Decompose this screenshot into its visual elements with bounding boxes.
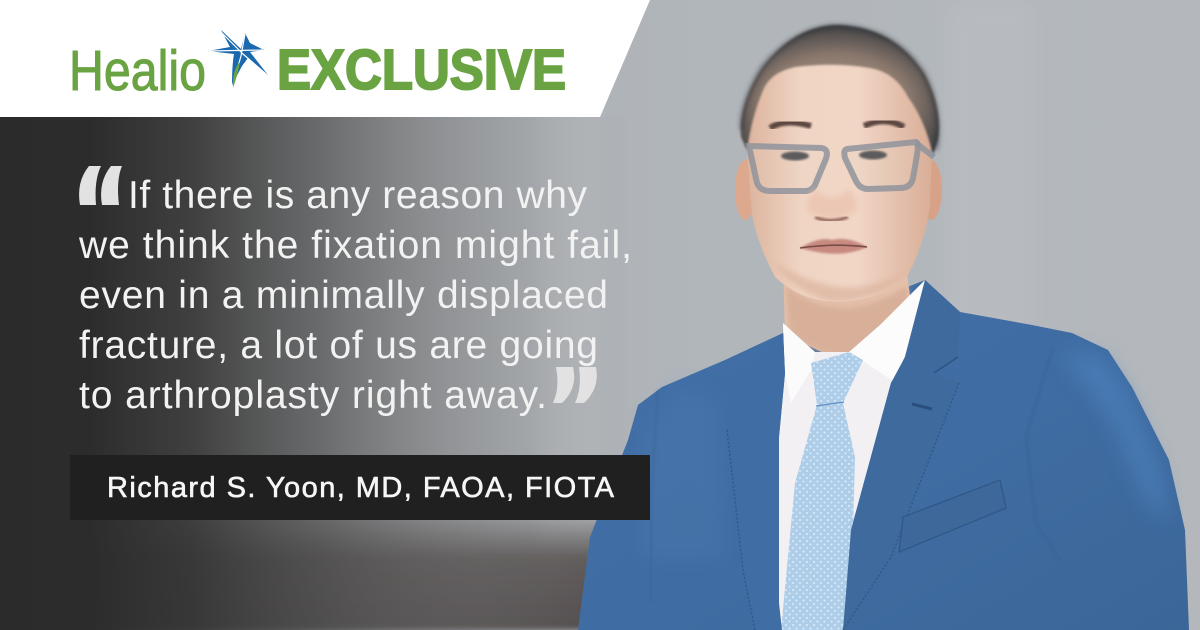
hair side shadows — [742, 26, 938, 150]
shirt collar — [783, 323, 815, 403]
dark left gradient overlay — [0, 117, 640, 630]
jacket lapels — [727, 333, 785, 630]
breast pocket — [899, 480, 1006, 552]
ears — [735, 160, 755, 220]
chin shading — [772, 262, 907, 302]
quote text: fracture, a lot of us are going — [79, 324, 598, 367]
portrait photo of the speaker — [578, 25, 1189, 630]
quote text: to arthroplasty right away. — [79, 374, 547, 417]
attribution bar: Richard S. Yoon, MD, FAOA, FIOTA — [107, 472, 615, 504]
glasses — [749, 142, 934, 191]
quote text: we think the fixation might fail, — [78, 224, 632, 267]
shirt — [779, 280, 925, 630]
mouth — [800, 239, 867, 254]
quote text — [78, 174, 632, 417]
top banner — [0, 0, 650, 117]
eyes — [781, 152, 809, 160]
icon: opening quotation mark — [79, 166, 122, 205]
eyebrows — [770, 122, 811, 128]
attribution bar — [70, 455, 650, 520]
suit jacket — [578, 280, 1189, 630]
logo: Healio wordmark: Healio — [69, 39, 206, 103]
quote text: even in a minimally displaced — [79, 274, 608, 317]
icon: closing quotation mark — [553, 367, 597, 403]
head — [746, 30, 932, 302]
lapel buttonhole — [912, 404, 932, 409]
nose — [807, 190, 857, 219]
icon: Healio star — [208, 30, 268, 88]
hair — [741, 25, 939, 155]
quote text: If there is any reason why — [128, 174, 588, 217]
neck — [783, 260, 912, 365]
logo: EXCLUSIVE: EXCLUSIVE — [277, 38, 566, 102]
tie — [781, 352, 863, 630]
